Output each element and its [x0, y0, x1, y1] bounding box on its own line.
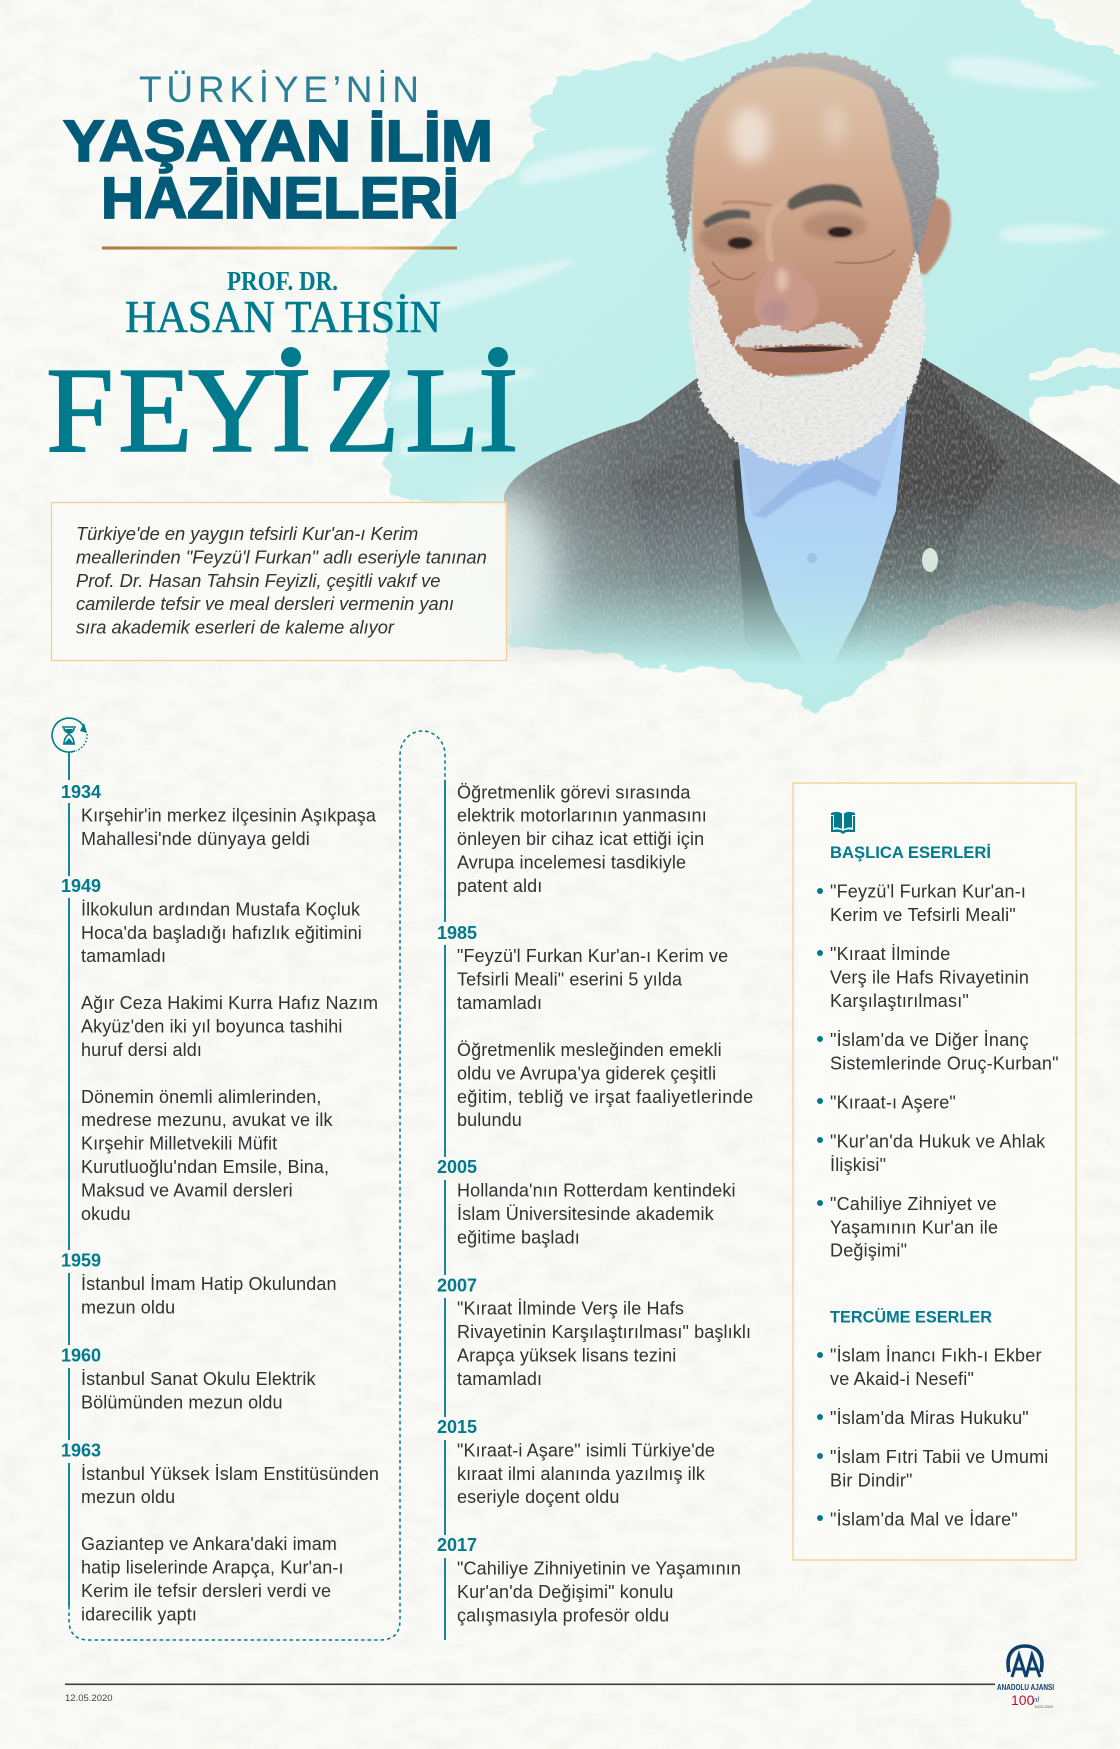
1985 entry: "Feyzü'l Furkan Kur'an-ı Kerim ve [457, 946, 728, 966]
1949 entry [61, 876, 378, 1224]
1949 entry: huruf dersi aldı [81, 1040, 202, 1060]
translated works list: "İslam Fıtri Tabii ve Umumi [830, 1447, 1048, 1467]
patent entry: elektrik motorlarının yanmasını [457, 806, 707, 826]
Prof. Dr.: PROF. DR. [227, 266, 338, 296]
icon: open book [831, 812, 855, 834]
1949 entry: Maksud ve Avamil dersleri [81, 1180, 293, 1200]
1985 entry: eğitim, tebliğ ve irşat faaliyetlerinde [457, 1087, 754, 1107]
portrait of Hasan Tahsin Feyizli [460, 52, 1120, 660]
2005 entry: eğitime başladı [457, 1227, 580, 1247]
main works list: "Kıraat İlminde [830, 944, 950, 964]
2015 entry: kıraat ilmi alanında yazılmış ilk [457, 1464, 706, 1484]
main works list: Verş ile Hafs Rivayetinin [830, 967, 1029, 987]
heading line 2: HAZİNELERİ [101, 166, 459, 231]
shirt button [807, 553, 817, 563]
logo: Anadolu Ajansı: 100 [1011, 1692, 1035, 1708]
main works list [817, 882, 1059, 1261]
logo: Anadolu Ajansı: yıl [1031, 1697, 1039, 1704]
intro box: camilerde tefsir ve meal dersleri vermenin yanı [76, 593, 454, 614]
1949 entry: medrese mezunu, avukat ve ilk [81, 1110, 333, 1130]
2017 entry [437, 1535, 741, 1626]
1949 entry: 1949 [61, 876, 101, 896]
logo: Anadolu Ajansı: ANADOLU AJANSI [997, 1682, 1054, 1692]
1963 entry: İstanbul Yüksek İslam Enstitüsünden [81, 1464, 379, 1484]
patent entry: patent aldı [457, 876, 542, 896]
name [46, 266, 519, 478]
1985 entry [437, 923, 754, 1130]
icon: hourglass timer [52, 718, 87, 752]
1959 entry: mezun oldu [81, 1298, 175, 1318]
2017 entry: "Cahiliye Zihniyetinin ve Yaşamının [457, 1559, 741, 1579]
patent entry [457, 782, 707, 896]
2007 entry: Arapça yüksek lisans tezini [457, 1346, 676, 1366]
intro box: Türkiye'de en yaygın tefsirli Kur'an-ı Kerim [76, 523, 418, 544]
scar ridge [768, 202, 788, 262]
1949 entry: okudu [81, 1204, 131, 1224]
nose [754, 262, 819, 333]
1934 entry: Kırşehir'in merkez ilçesinin Aşıkpaşa [81, 806, 377, 826]
1959 entry: 1959 [61, 1251, 101, 1271]
1960 entry [61, 1346, 316, 1412]
2007 entry [437, 1275, 751, 1389]
left eyebrow [703, 210, 750, 228]
2015 entry: eseriyle doçent oldu [457, 1487, 620, 1507]
1949 entry: İlkokulun ardından Mustafa Koçluk [81, 899, 361, 919]
2017 entry: çalışmasıyla profesör oldu [457, 1606, 669, 1626]
main works list: "Kıraat-ı Aşere" [830, 1092, 956, 1112]
left lapel [632, 462, 734, 542]
Hasan Tahsin: HASAN TAHSİN [125, 291, 441, 342]
1963 entry: hatip liselerinde Arapça, Kur'an-ı [81, 1557, 344, 1577]
2017 entry: Kur'an'da Değişimi" konulu [457, 1582, 674, 1602]
right eye [828, 227, 852, 237]
main works list: Sistemlerinde Oruç-Kurban" [830, 1053, 1059, 1073]
nose tip [762, 300, 788, 324]
1963 entry: 1963 [61, 1440, 101, 1460]
main works list: "İslam'da ve Diğer İnanç [830, 1030, 1029, 1050]
ear [915, 198, 951, 275]
intro box: meallerinden "Feyzü'l Furkan" adlı eseriyle tanınan [76, 546, 487, 568]
eye socket shade [700, 222, 760, 254]
heading: translated works: TERCÜME ESERLER [830, 1308, 992, 1326]
1963 entry: Gaziantep ve Ankara'daki imam [81, 1534, 337, 1554]
mist right [930, 645, 1120, 735]
nose highlight [776, 268, 788, 292]
translated works list: ve Akaid-i Nesefi" [830, 1369, 974, 1389]
logo: Anadolu Ajansı [997, 1646, 1054, 1709]
patent entry: önleyen bir cihaz icat ettiği için [457, 829, 704, 849]
1985 entry: 1985 [437, 923, 477, 943]
main works list: Yaşamının Kur'an ile [830, 1217, 998, 1237]
2005 entry: 2005 [437, 1157, 477, 1177]
1960 entry: Bölümünden mezun oldu [81, 1392, 283, 1412]
grey hair [667, 53, 938, 262]
lapel pin [922, 548, 938, 572]
timeline track [69, 731, 445, 1640]
beard [690, 250, 925, 464]
1963 entry: idarecilik yaptı [81, 1604, 197, 1624]
timeline column 1 [61, 782, 379, 1624]
2005 entry: İslam Üniversitesinde akademik [457, 1204, 715, 1224]
main works list: "Feyzü'l Furkan Kur'an-ı [830, 882, 1026, 902]
2007 entry: 2007 [437, 1275, 477, 1295]
collar shadow [752, 455, 882, 518]
1949 entry: Kırşehir Milletvekili Müfit [81, 1134, 277, 1154]
under-eye folds [695, 250, 895, 287]
2007 entry: tamamladı [457, 1369, 542, 1389]
2007 entry: Rivayetinin Karşılaştırılması" başlıklı [457, 1322, 751, 1342]
right eye socket shade [803, 212, 867, 240]
main works list: "Cahiliye Zihniyet ve [830, 1194, 997, 1214]
panel: works [793, 783, 1076, 1560]
1985 entry: bulundu [457, 1110, 522, 1130]
title [63, 69, 493, 231]
intro box [52, 502, 506, 660]
2005 entry: Hollanda'nın Rotterdam kentindeki [457, 1180, 736, 1200]
subtitle: Türkiye'nin: TÜRKİYE’NİN [139, 69, 419, 110]
1959 entry [61, 1251, 337, 1318]
timeline column 2 [437, 782, 754, 1626]
gold divider [102, 246, 457, 250]
1934 entry: Mahallesi'nde dünyaya geldi [81, 829, 310, 849]
logo: Anadolu Ajansı: 1920-2020 [1034, 1704, 1054, 1709]
jacket [504, 358, 1120, 659]
2015 entry: "Kıraat-i Aşare" isimli Türkiye'de [457, 1440, 715, 1460]
1963 entry: mezun oldu [81, 1487, 175, 1507]
translated works list: "İslam'da Miras Hukuku" [830, 1408, 1029, 1428]
right eyebrow [785, 184, 862, 210]
main works list: İlişkisi" [830, 1155, 886, 1175]
translated works list [817, 1346, 1048, 1530]
face [692, 67, 914, 380]
1985 entry: oldu ve Avrupa'ya giderek çeşitli [457, 1063, 716, 1083]
main works list: Kerim ve Tefsirli Meali" [830, 905, 1016, 925]
vest [733, 459, 870, 649]
collars [740, 406, 902, 514]
2015 entry [437, 1417, 715, 1507]
right lapel [886, 358, 1005, 590]
1985 entry: Öğretmenlik mesleğinden emekli [457, 1040, 722, 1060]
1959 entry: İstanbul İmam Hatip Okulundan [81, 1274, 337, 1294]
1963 entry [61, 1440, 379, 1624]
1949 entry: Hoca'da başladığı hafızlık eğitimini [81, 923, 362, 943]
1985 entry: Tefsirli Meali" eserini 5 yılda [457, 970, 683, 990]
heading: main works: BAŞLICA ESERLERİ [830, 843, 991, 862]
patent entry: Öğretmenlik görevi sırasında [457, 782, 691, 802]
1985 entry: tamamladı [457, 993, 542, 1013]
translated works list: "İslam İnancı Fıkh-ı Ekber [830, 1346, 1042, 1366]
1963 entry: Kerim ile tefsir dersleri verdi ve [81, 1581, 331, 1601]
1949 entry: tamamladı [81, 946, 166, 966]
shirt [738, 396, 908, 660]
intro box: Prof. Dr. Hasan Tahsin Feyizli, çeşitli vakıf ve [76, 570, 440, 591]
1934 entry [61, 782, 377, 849]
2017 entry: 2017 [437, 1535, 477, 1555]
patent entry: Avrupa incelemesi tasdikiyle [457, 853, 686, 873]
watercolor wash [381, 0, 1120, 718]
mouth [752, 346, 852, 352]
main works list: "Kur'an'da Hukuk ve Ahlak [830, 1131, 1046, 1151]
mist left [445, 490, 555, 650]
1949 entry: Kurutluoğlu'ndan Emsile, Bina, [81, 1157, 329, 1177]
forehead highlight 2 [823, 105, 847, 145]
2015 entry: 2015 [437, 1417, 477, 1437]
Feyizli: FEYİZLİ [46, 343, 519, 478]
1949 entry: Akyüz'den iki yıl boyunca tashihi [81, 1016, 343, 1036]
2007 entry: "Kıraat İlminde Verş ile Hafs [457, 1299, 684, 1319]
1934 entry: 1934 [61, 782, 101, 802]
main works list: Değişimi" [830, 1241, 907, 1261]
translated works list: Bir Dindir" [830, 1470, 913, 1490]
translated works list: "İslam'da Mal ve İdare" [830, 1510, 1018, 1530]
heading line 1: YAŞAYAN İLİM [63, 109, 493, 174]
left eye [728, 238, 752, 248]
forehead crease [722, 201, 772, 206]
mustache [732, 322, 862, 348]
1960 entry: 1960 [61, 1346, 101, 1366]
footer rule [65, 1684, 995, 1685]
1949 entry: Dönemin önemli alimlerinden, [81, 1087, 321, 1107]
2005 entry [437, 1157, 736, 1247]
1960 entry: İstanbul Sanat Okulu Elektrik [81, 1369, 316, 1389]
date: 12.05.2020 [65, 1693, 113, 1704]
intro box: sıra akademik eserleri de kaleme alıyor [76, 616, 395, 638]
forehead highlight [730, 107, 770, 163]
1949 entry: Ağır Ceza Hakimi Kurra Hafız Nazım [81, 993, 378, 1013]
lower lip [760, 352, 846, 363]
main works list: Karşılaştırılması" [830, 991, 969, 1011]
